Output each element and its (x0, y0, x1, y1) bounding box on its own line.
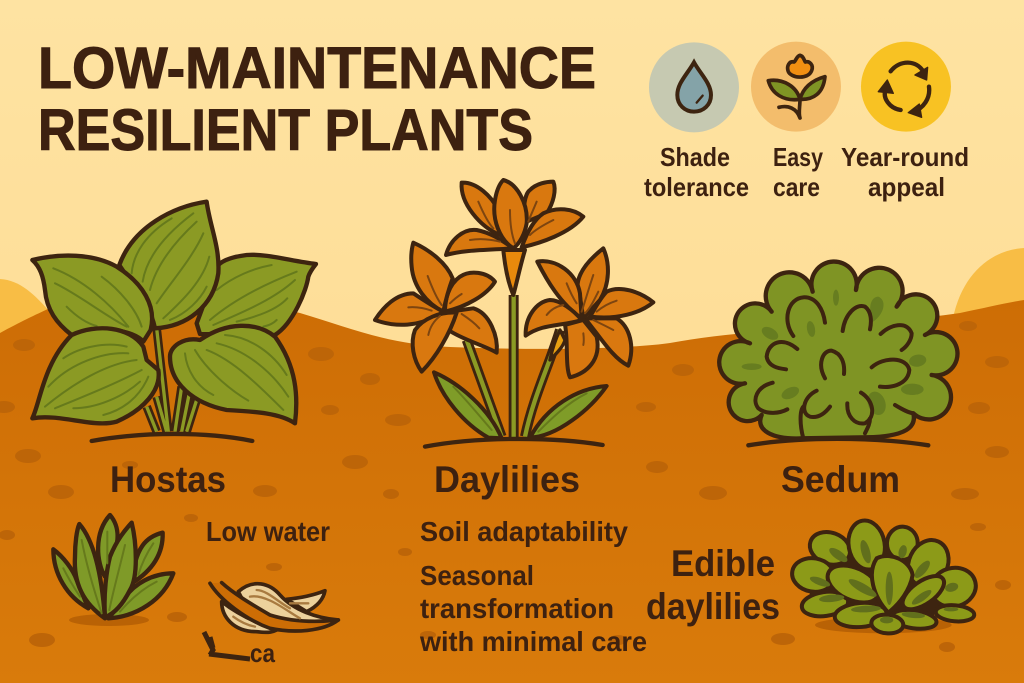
heading: Hostas: Hostas (110, 459, 226, 500)
right hill (953, 248, 1024, 320)
icon labels: Shade (660, 142, 730, 172)
icon labels: appeal (868, 172, 945, 202)
title: RESILIENT PLANTS (38, 98, 533, 163)
label: Edible daylilies: daylilies (646, 586, 780, 627)
label: Edible daylilies (646, 543, 780, 627)
left flower centre (432, 299, 458, 324)
title (38, 36, 596, 163)
icon: dry leaves (210, 583, 338, 632)
icon: year-round cycle arrows (861, 42, 951, 132)
soil speckles (0, 321, 1011, 652)
icon: easy care flower (751, 42, 841, 132)
plant: hostas (32, 202, 316, 441)
plant: daylilies (375, 180, 653, 447)
heading: Daylilies: Daylilies (434, 459, 580, 500)
garbled label: Yucca: ca (250, 638, 275, 668)
small plant: succulent (53, 515, 173, 626)
label: Seasonal transformation: transformation (420, 593, 614, 624)
icon labels (644, 142, 969, 202)
icon: shade tolerance water drop (649, 42, 739, 132)
garbled label: Yucca (204, 632, 275, 668)
label: Seasonal transformation: with minimal care (419, 626, 647, 657)
label: Seasonal transformation: Seasonal (420, 560, 534, 591)
icon labels: Easy (773, 142, 823, 172)
label: Low water: Low water (206, 516, 330, 547)
left hill (0, 279, 50, 340)
icon labels: Year-round (841, 142, 969, 172)
icon labels: tolerance (644, 172, 749, 202)
label: Edible daylilies: Edible (671, 543, 775, 584)
right flower centre (571, 299, 599, 327)
small plant: rosette (789, 518, 980, 635)
icon labels: care (773, 172, 820, 202)
label: Soil adaptability: Soil adaptability (420, 516, 628, 547)
soil ground (0, 297, 1024, 683)
heading: Sedum: Sedum (781, 459, 900, 500)
label: Seasonal transformation (419, 560, 647, 657)
title: LOW-MAINTENANCE (38, 36, 596, 101)
plant: sedum (719, 262, 958, 445)
